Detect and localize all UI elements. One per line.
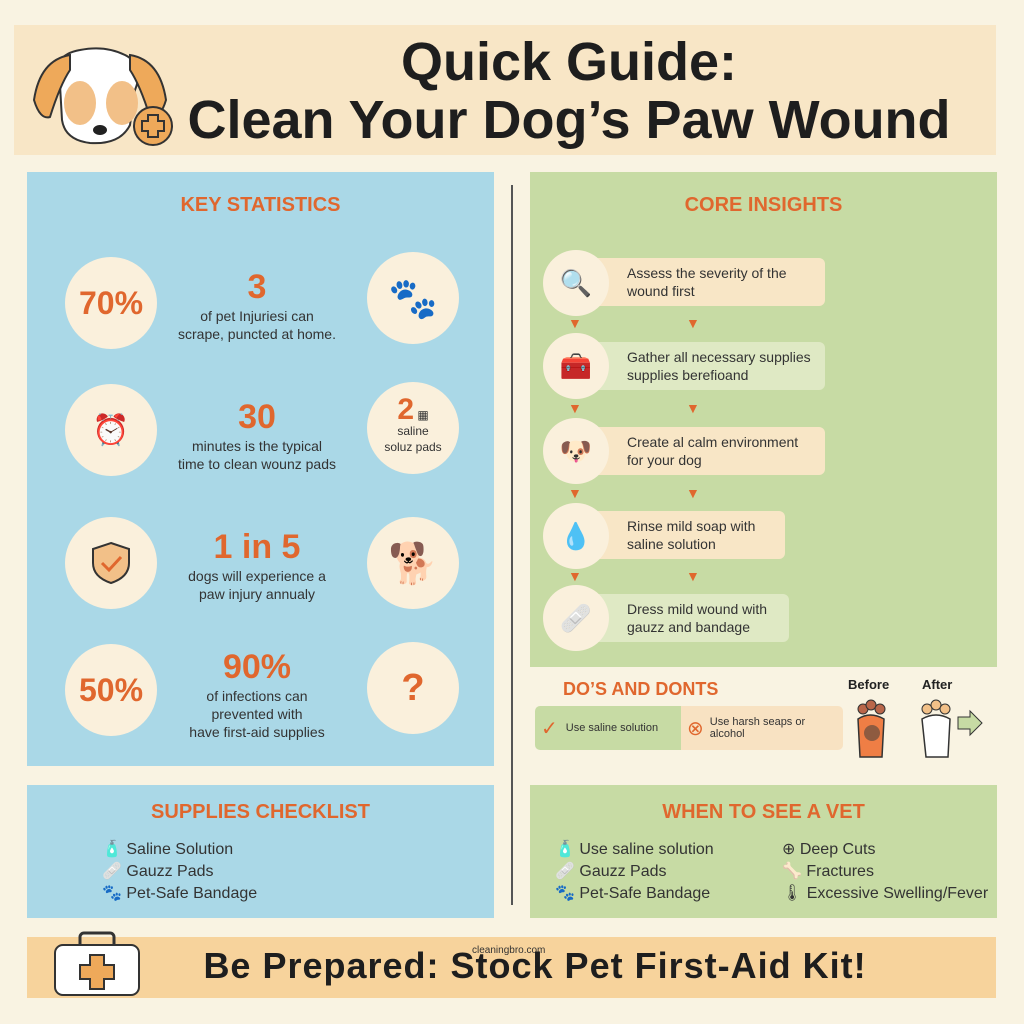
icon: first aid kit [54, 932, 140, 996]
arrows: ▼ [686, 315, 700, 331]
heading: KEY STATISTICS [180, 194, 341, 216]
stat row 4 [65, 644, 157, 736]
panel: supplies checklist: 🐾 Pet-Safe Bandage [102, 885, 257, 902]
arrows: ▼ [686, 400, 700, 416]
step 2 [577, 342, 825, 390]
step 1 [577, 258, 825, 306]
footer banner [27, 937, 996, 998]
panel: when to see a vet: 🌡 Excessive Swelling/Fever [782, 885, 988, 902]
dos and donts bar: Use harsh seaps or alcohol [710, 716, 805, 740]
text: 💧 [560, 520, 592, 550]
header band [14, 25, 996, 155]
dos and donts bar: ✓ [541, 718, 558, 740]
title: Clean Your Dog’s Paw Wound [187, 90, 951, 150]
dos and donts bar: ⊗ [687, 718, 704, 740]
panel: when to see a vet: 🧴 Use saline solution [555, 841, 714, 858]
stat row 2: ⏰ [92, 414, 130, 446]
before after paws [848, 677, 983, 758]
before after paws: Before [848, 677, 889, 692]
panel: key statistics: 1 in 5 [214, 528, 300, 566]
arrows [568, 315, 700, 584]
step 1: wound first [627, 283, 695, 299]
panel: key statistics: 3 [248, 268, 266, 306]
icon: dog [33, 47, 167, 144]
step 3 [577, 427, 825, 475]
panel: key statistics: of infections can [206, 688, 308, 704]
arrows: ▼ [686, 568, 700, 584]
dos and donts heading: DO’S AND DONTS [563, 679, 718, 699]
step 4: saline solution [627, 536, 716, 552]
panel: key statistics: 2 ▦ [397, 392, 429, 426]
step 3: Create al calm environment [627, 434, 798, 450]
text: 🧰 [560, 350, 592, 380]
step 5: gauzz and bandage [627, 619, 750, 635]
panel: when to see a vet: ⊕ Deep Cuts [782, 841, 875, 858]
title: Quick Guide: [401, 32, 737, 92]
title [187, 32, 951, 150]
panel: when to see a vet [530, 785, 997, 918]
panel: key statistics: 90% [223, 648, 291, 686]
panel: key statistics: have first-aid supplies [189, 724, 325, 740]
stat row 1 [65, 257, 157, 349]
panel: key statistics: minutes is the typical [192, 438, 322, 454]
step 5: Dress mild wound with [627, 601, 767, 617]
stat row 3 [65, 517, 157, 609]
icon: plus badge [133, 106, 173, 146]
panel: key statistics: prevented with [211, 706, 303, 722]
panel: supplies checklist: 🩹 Gauzz Pads [102, 863, 214, 880]
panel: key statistics: 30 [238, 398, 276, 436]
panel: key statistics: scrape, puncted at home. [178, 326, 336, 342]
panel: supplies checklist: SUPPLIES CHECKLIST [151, 801, 370, 823]
panel: when to see a vet: WHEN TO SEE A VET [662, 801, 865, 823]
step 4 [577, 511, 785, 559]
panel: core insights [530, 172, 997, 667]
panel: supplies checklist [27, 785, 494, 918]
step 3: for your dog [627, 452, 702, 468]
arrows: ▼ [686, 485, 700, 501]
footer text: Be Prepared: Stock Pet First-Aid Kit! [203, 945, 867, 986]
arrows: ▼ [568, 485, 582, 501]
panel: key statistics: dogs will experience a [188, 568, 326, 584]
panel: key statistics: time to clean wounz pads [178, 456, 336, 472]
text: 🐶 [560, 436, 592, 466]
dos and donts bar [535, 706, 843, 750]
footer banner: cleaningbro.com [472, 945, 545, 956]
text: 🔍 [560, 268, 592, 298]
dos and donts bar: Use saline solution [566, 722, 658, 734]
step 4: Rinse mild soap with [627, 518, 755, 534]
panel: when to see a vet: 🦴 Fractures [782, 863, 874, 880]
heading: CORE INSIGHTS [685, 194, 842, 216]
step 2: supplies berefioand [627, 367, 748, 383]
panel: supplies checklist: 🧴 Saline Solution [102, 841, 233, 858]
stat row 2 [65, 384, 157, 476]
panel: key statistics: saline [397, 424, 429, 438]
panel: key statistics: paw injury annualy [199, 586, 315, 602]
panel: key statistics: soluz pads [384, 440, 442, 454]
stat row 4: 50% [79, 672, 143, 708]
arrows: ▼ [568, 568, 582, 584]
divider [511, 185, 513, 905]
panel: key statistics: ? [401, 666, 425, 708]
panel: key statistics [27, 172, 494, 766]
panel: key statistics: 🐕 [388, 542, 438, 586]
text: 🩹 [560, 602, 592, 632]
panel: key statistics: 🐾 [388, 276, 438, 320]
before after paws: After [922, 677, 952, 692]
step 2: Gather all necessary supplies [627, 349, 811, 365]
panel: when to see a vet: 🩹 Gauzz Pads [555, 863, 667, 880]
step 5 [577, 594, 789, 642]
panel: when to see a vet: 🐾 Pet-Safe Bandage [555, 885, 710, 902]
stat row 1: 70% [79, 284, 143, 320]
arrows: ▼ [568, 400, 582, 416]
step 1: Assess the severity of the [627, 265, 787, 281]
panel: key statistics: of pet Injuriesi can [200, 308, 314, 324]
arrows: ▼ [568, 315, 582, 331]
